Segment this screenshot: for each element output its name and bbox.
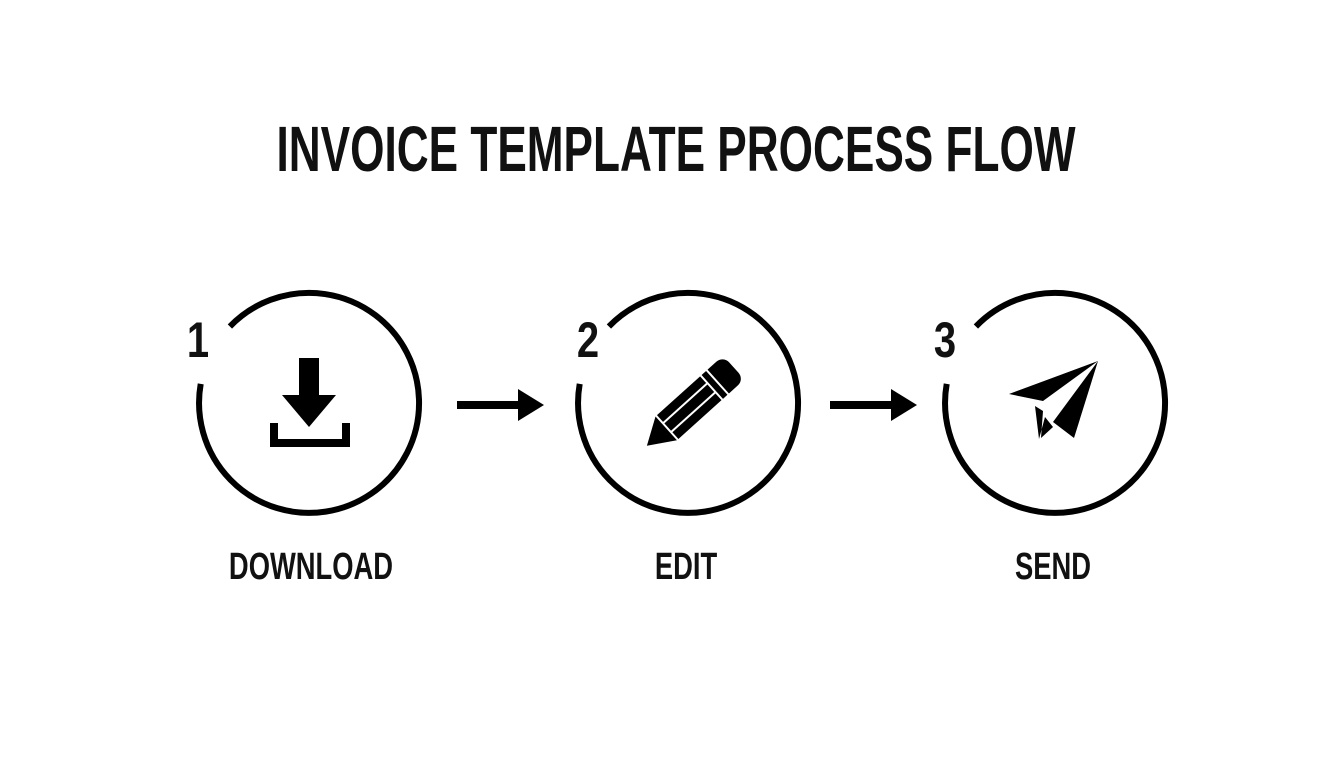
- step 3: send circle: [945, 293, 1165, 513]
- label: edit: EDIT: [655, 546, 717, 588]
- arrow 2: [830, 389, 917, 421]
- icon: pencil: [636, 356, 745, 458]
- arrow 1: [457, 389, 544, 421]
- step number 3: 3: [934, 312, 956, 368]
- label: send: SEND: [1015, 546, 1091, 588]
- icon: paper plane: [1009, 361, 1098, 439]
- icon: download: [270, 358, 350, 447]
- step 2: edit circle: [578, 293, 798, 513]
- step 1: download circle: [199, 293, 419, 513]
- step number 1: 1: [187, 312, 209, 368]
- step number 2: 2: [577, 312, 599, 368]
- title: INVOICE TEMPLATE PROCESS FLOW: [277, 113, 1075, 185]
- label: download: DOWNLOAD: [229, 546, 393, 588]
